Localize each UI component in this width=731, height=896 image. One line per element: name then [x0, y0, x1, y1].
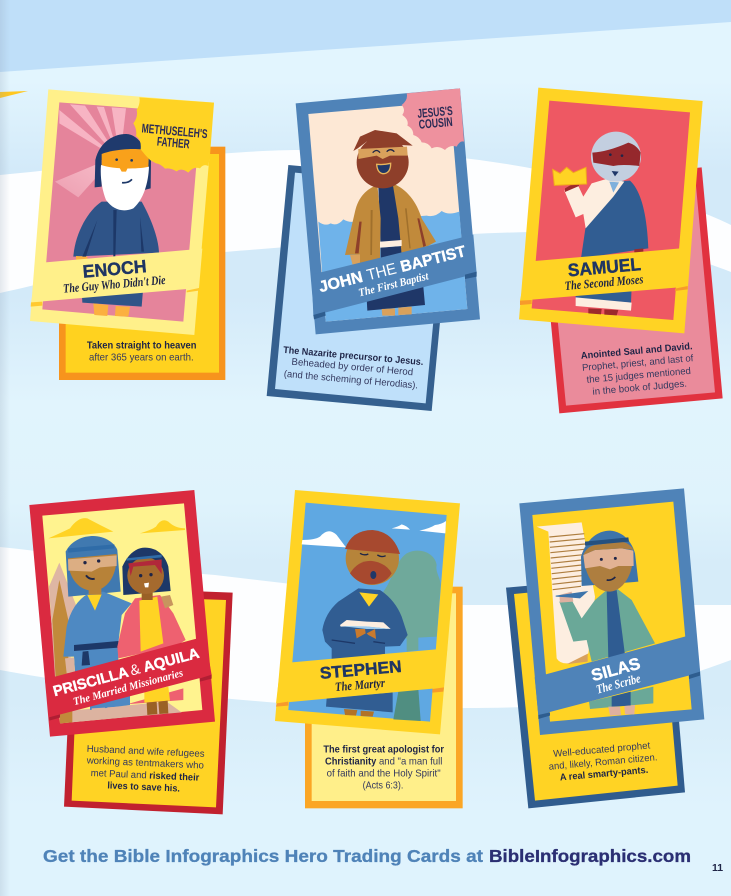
badge: Jesus's cousin: COUSIN: [418, 115, 453, 132]
footer call to action: Get the Bible Infographics Hero Trading Cards at: [43, 846, 483, 866]
back panel: Silas: Well-educated prophet: [553, 740, 651, 760]
ribbon: Stephen: STEPHEN: [319, 657, 402, 683]
figure: Enoch: [73, 134, 159, 317]
figure: Stephen: [322, 530, 408, 717]
back panel: Samuel: Prophet, priest, and last of: [582, 353, 694, 374]
card: Priscilla and Aquila: [29, 490, 233, 814]
back panel: Stephen: [305, 587, 463, 808]
back panel: John: The Nazarite precursor to Jesus.: [283, 345, 424, 368]
back panel: Priscilla and Aquila: working as tentmakers who: [85, 755, 204, 772]
ribbon: John: JOHN: [317, 269, 365, 296]
ribbon: Priscilla and Aquila: PRISCILLA: [52, 665, 131, 700]
card: Stephen: [275, 490, 463, 808]
ribbon: Priscilla and Aquila: &: [128, 661, 142, 680]
back panel: Priscilla and Aquila: risked their: [149, 771, 200, 784]
back panel: Stephen: The first great apologist for: [323, 744, 444, 755]
back panel: Silas: and, likely, Roman citizen.: [548, 752, 658, 773]
back panel: Enoch: [59, 147, 225, 380]
back panel: Priscilla and Aquila: met Paul and: [90, 768, 147, 781]
back panel: Samuel: [538, 167, 723, 413]
ribbon: John: [312, 235, 477, 319]
back panel: Samuel: the 15 judges mentioned: [586, 366, 691, 386]
card: Samuel: [519, 88, 723, 413]
card: Enoch: [30, 89, 225, 380]
figure: John: [345, 130, 436, 316]
badge: Methuselah's father: METHUSELEH'S: [141, 121, 208, 141]
page number: 11: [712, 862, 723, 874]
ribbon: Silas: [535, 634, 700, 719]
ribbon: Silas: SILAS: [589, 654, 642, 685]
ribbon: Enoch: [31, 249, 202, 307]
badge: Jesus's cousin: JESUS'S: [417, 104, 453, 121]
back panel: Silas: A real smarty-pants.: [559, 765, 649, 784]
ribbon: Priscilla and Aquila: AQUILA: [142, 646, 202, 676]
badge: Methuselah's father: FATHER: [156, 135, 190, 151]
ribbon: John: The First Baptist: [357, 270, 431, 299]
front card: Priscilla and Aquila: [29, 490, 215, 737]
tree: [383, 551, 441, 721]
card: John the Baptist: [267, 88, 480, 411]
figure: Silas: [556, 531, 655, 716]
ribbon: John: THE: [365, 260, 398, 284]
back panel: John: (and the scheming of Herodias).: [283, 369, 418, 392]
back panel: Priscilla and Aquila: [64, 587, 233, 814]
front card: Silas: [519, 488, 704, 735]
front card: Samuel: [519, 88, 703, 333]
back panel: Stephen: and "a man full: [379, 756, 442, 767]
back panel: John: [267, 165, 453, 411]
back panel: Priscilla and Aquila: lives to save his.: [107, 780, 180, 795]
back panel: Stephen: of faith and the Holy Spirit": [327, 769, 441, 780]
badge: Jesus's cousin: [402, 88, 464, 150]
back panel: Enoch: after 365 years on earth.: [89, 353, 194, 364]
ribbon: Priscilla and Aquila: The Married Missionaries: [72, 667, 185, 708]
front card: Stephen: [275, 490, 460, 734]
back panel: Silas: [506, 573, 685, 808]
ribbon: Samuel: The Second Moses: [564, 272, 644, 293]
figure: Samuel: [553, 132, 648, 315]
ribbon: Enoch: The Guy Who Didn't Die: [63, 273, 166, 296]
scroll: [537, 522, 595, 664]
card: Silas: [506, 488, 704, 808]
ribbon: Stephen: [276, 648, 447, 707]
ribbon: Enoch: ENOCH: [82, 256, 147, 282]
back panel: Priscilla and Aquila: Husband and wife refugees: [86, 744, 205, 760]
figure: Aquila: [63, 536, 132, 719]
figure: Priscilla: [117, 548, 186, 715]
ribbon: Samuel: [520, 248, 689, 305]
back panel: Stephen: Christianity: [325, 756, 377, 767]
ribbon: Priscilla and Aquila: [45, 636, 212, 721]
ribbon: Samuel: SAMUEL: [567, 254, 642, 280]
badge: Methuselah's father: [133, 97, 214, 173]
front card: Enoch: [30, 89, 214, 335]
back panel: Samuel: in the book of Judges.: [592, 379, 687, 398]
footer call to action: [43, 846, 691, 866]
back panel: John: Beheaded by order of Herod: [291, 357, 414, 378]
back panel: Samuel: Anointed Saul and David.: [580, 341, 693, 362]
back panel: Enoch: Taken straight to heaven: [87, 341, 197, 352]
front card: John: [296, 88, 480, 334]
footer call to action: BibleInfographics.com: [489, 846, 691, 866]
ribbon: Silas: The Scribe: [595, 671, 642, 697]
ribbon: Stephen: The Martyr: [334, 676, 386, 694]
ribbon: John: BAPTIST: [399, 243, 468, 276]
back panel: Stephen: (Acts 6:3).: [363, 780, 403, 791]
